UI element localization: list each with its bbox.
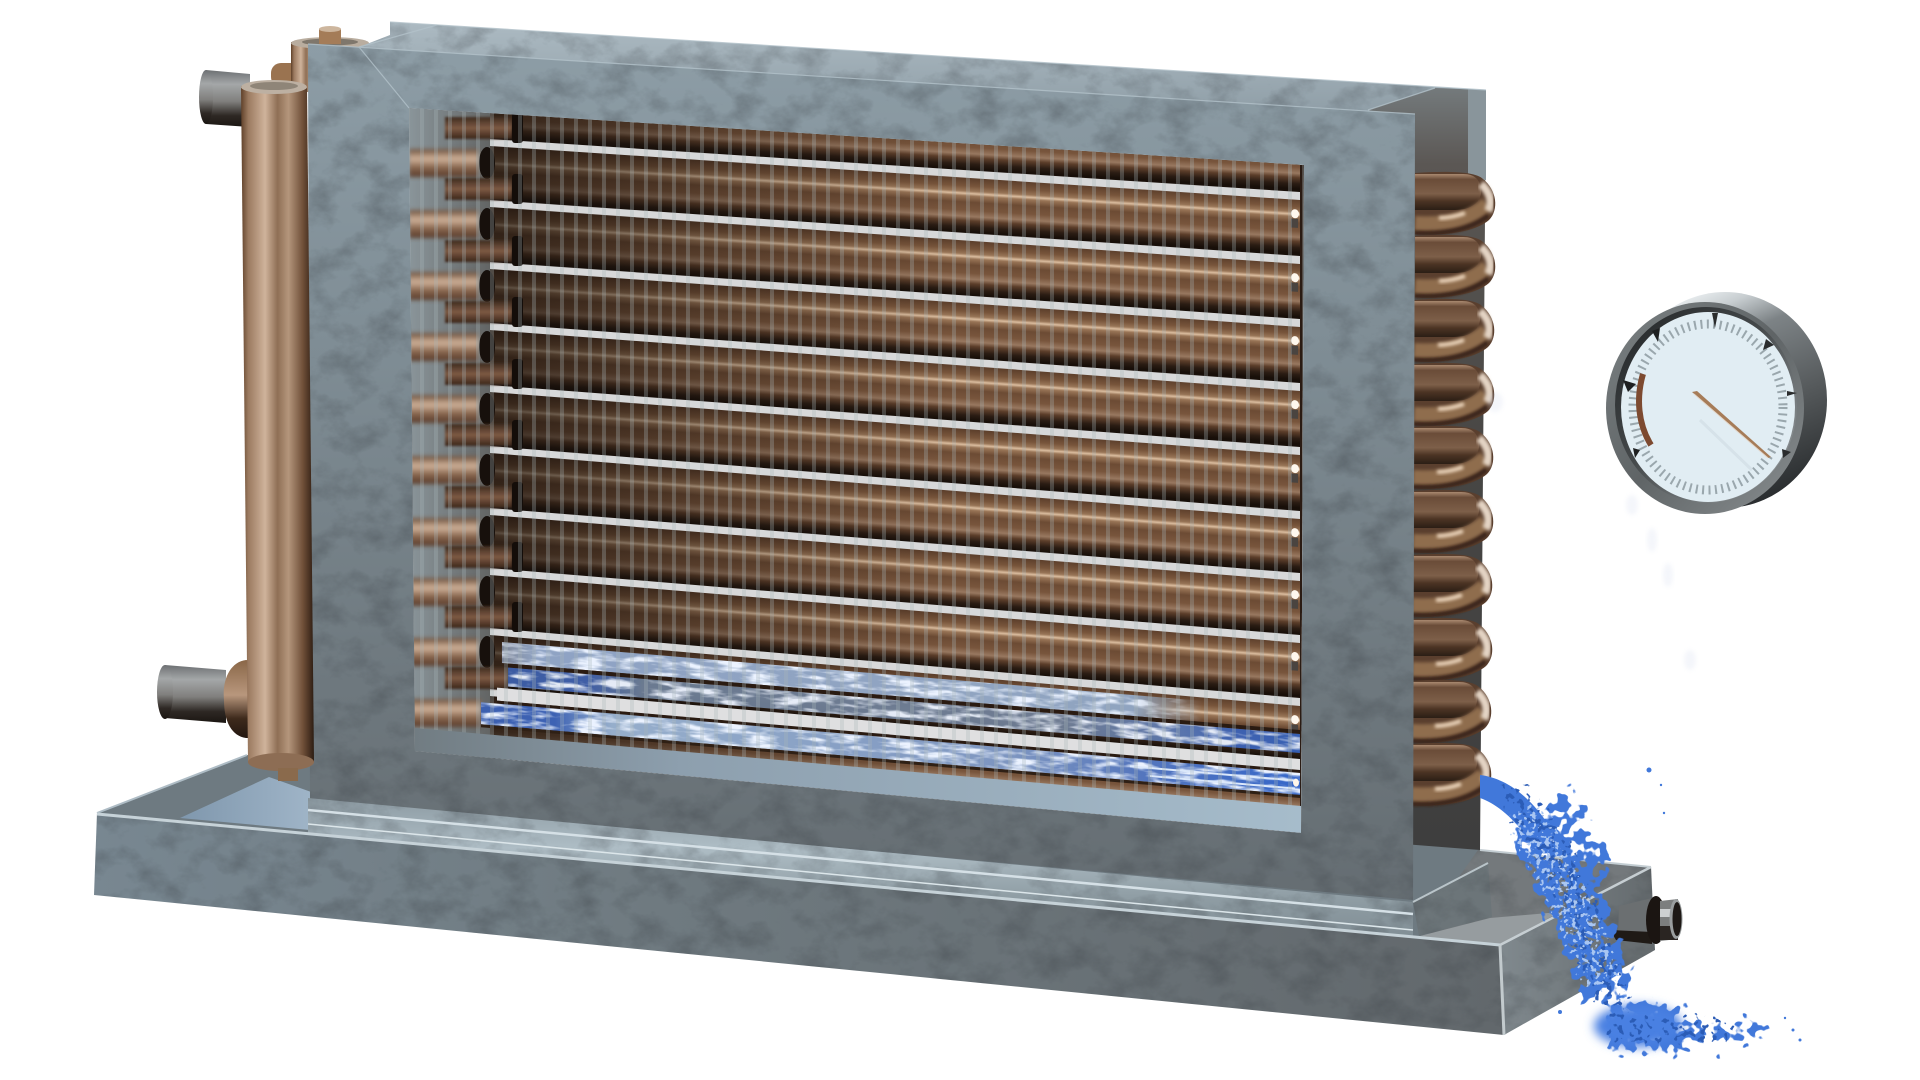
gauge needle xyxy=(1692,391,1771,470)
outlet tee on manifold xyxy=(224,660,262,738)
drain pan front and side faces xyxy=(94,813,1655,1035)
pressure gauge xyxy=(1606,292,1827,514)
gauge tick scale xyxy=(1623,313,1797,490)
faint dried water trail xyxy=(1487,392,1696,670)
gauge bezel xyxy=(1606,302,1804,514)
stream spray particles xyxy=(1530,790,1775,1035)
gauge housing xyxy=(1623,292,1827,508)
U-bend coil returns xyxy=(1411,172,1495,805)
drain fitting xyxy=(1610,896,1682,944)
window backing xyxy=(409,108,1304,833)
left header zone xyxy=(409,100,499,760)
upper inlet pipe xyxy=(199,70,250,127)
left tube stubs xyxy=(409,113,523,727)
puddle core xyxy=(1594,1005,1682,1047)
frame top edge and mitre xyxy=(308,22,1486,114)
spray dark tone xyxy=(1515,800,1720,1030)
lower outlet pipe xyxy=(157,665,226,723)
gauge dial xyxy=(1621,312,1795,502)
aluminium fin grid xyxy=(409,100,1309,820)
gauge red-brown range arc xyxy=(1639,374,1651,445)
panel: right rear side plate xyxy=(1368,88,1486,852)
panel: frame front face xyxy=(308,44,1415,900)
lower window band xyxy=(415,728,1301,833)
drain pan inside xyxy=(97,755,1651,945)
rear manifold and top bolt xyxy=(271,26,369,92)
water stream and puddle xyxy=(1480,768,1802,1047)
spray highlights xyxy=(1530,825,1598,970)
frost on lower tubes xyxy=(481,642,1300,798)
panel: rear wall of casing xyxy=(359,22,1486,130)
coil core seen through window xyxy=(409,78,1309,833)
stream core xyxy=(1480,775,1552,858)
base flange under casing xyxy=(308,798,1492,940)
copper front manifold xyxy=(241,80,314,781)
tube rows xyxy=(490,78,1300,828)
stray droplets xyxy=(1558,768,1802,1042)
